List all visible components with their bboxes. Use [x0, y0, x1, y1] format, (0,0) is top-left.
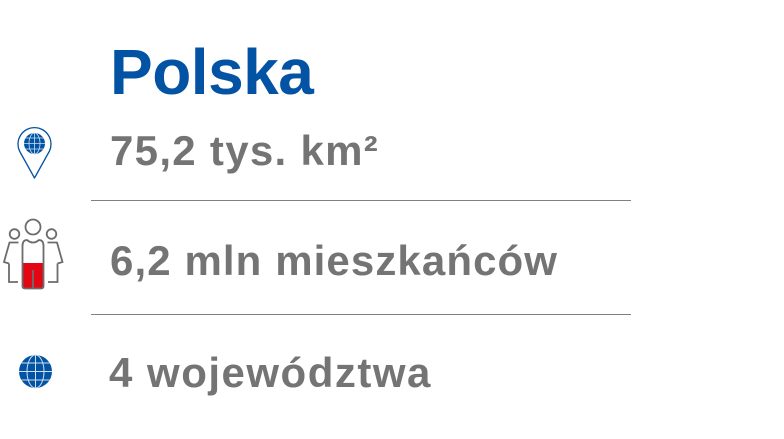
title: Polska	[110, 36, 313, 108]
icon: globe	[19, 354, 52, 388]
icon: location pin with globe	[17, 127, 52, 179]
text: population: 6,2 mln mieszkańców	[110, 237, 558, 284]
icon: people with red and white figure	[3, 218, 64, 290]
text: area: 75,2 tys. km²	[110, 127, 379, 174]
text: voivodeships: 4 województwa	[109, 349, 432, 396]
